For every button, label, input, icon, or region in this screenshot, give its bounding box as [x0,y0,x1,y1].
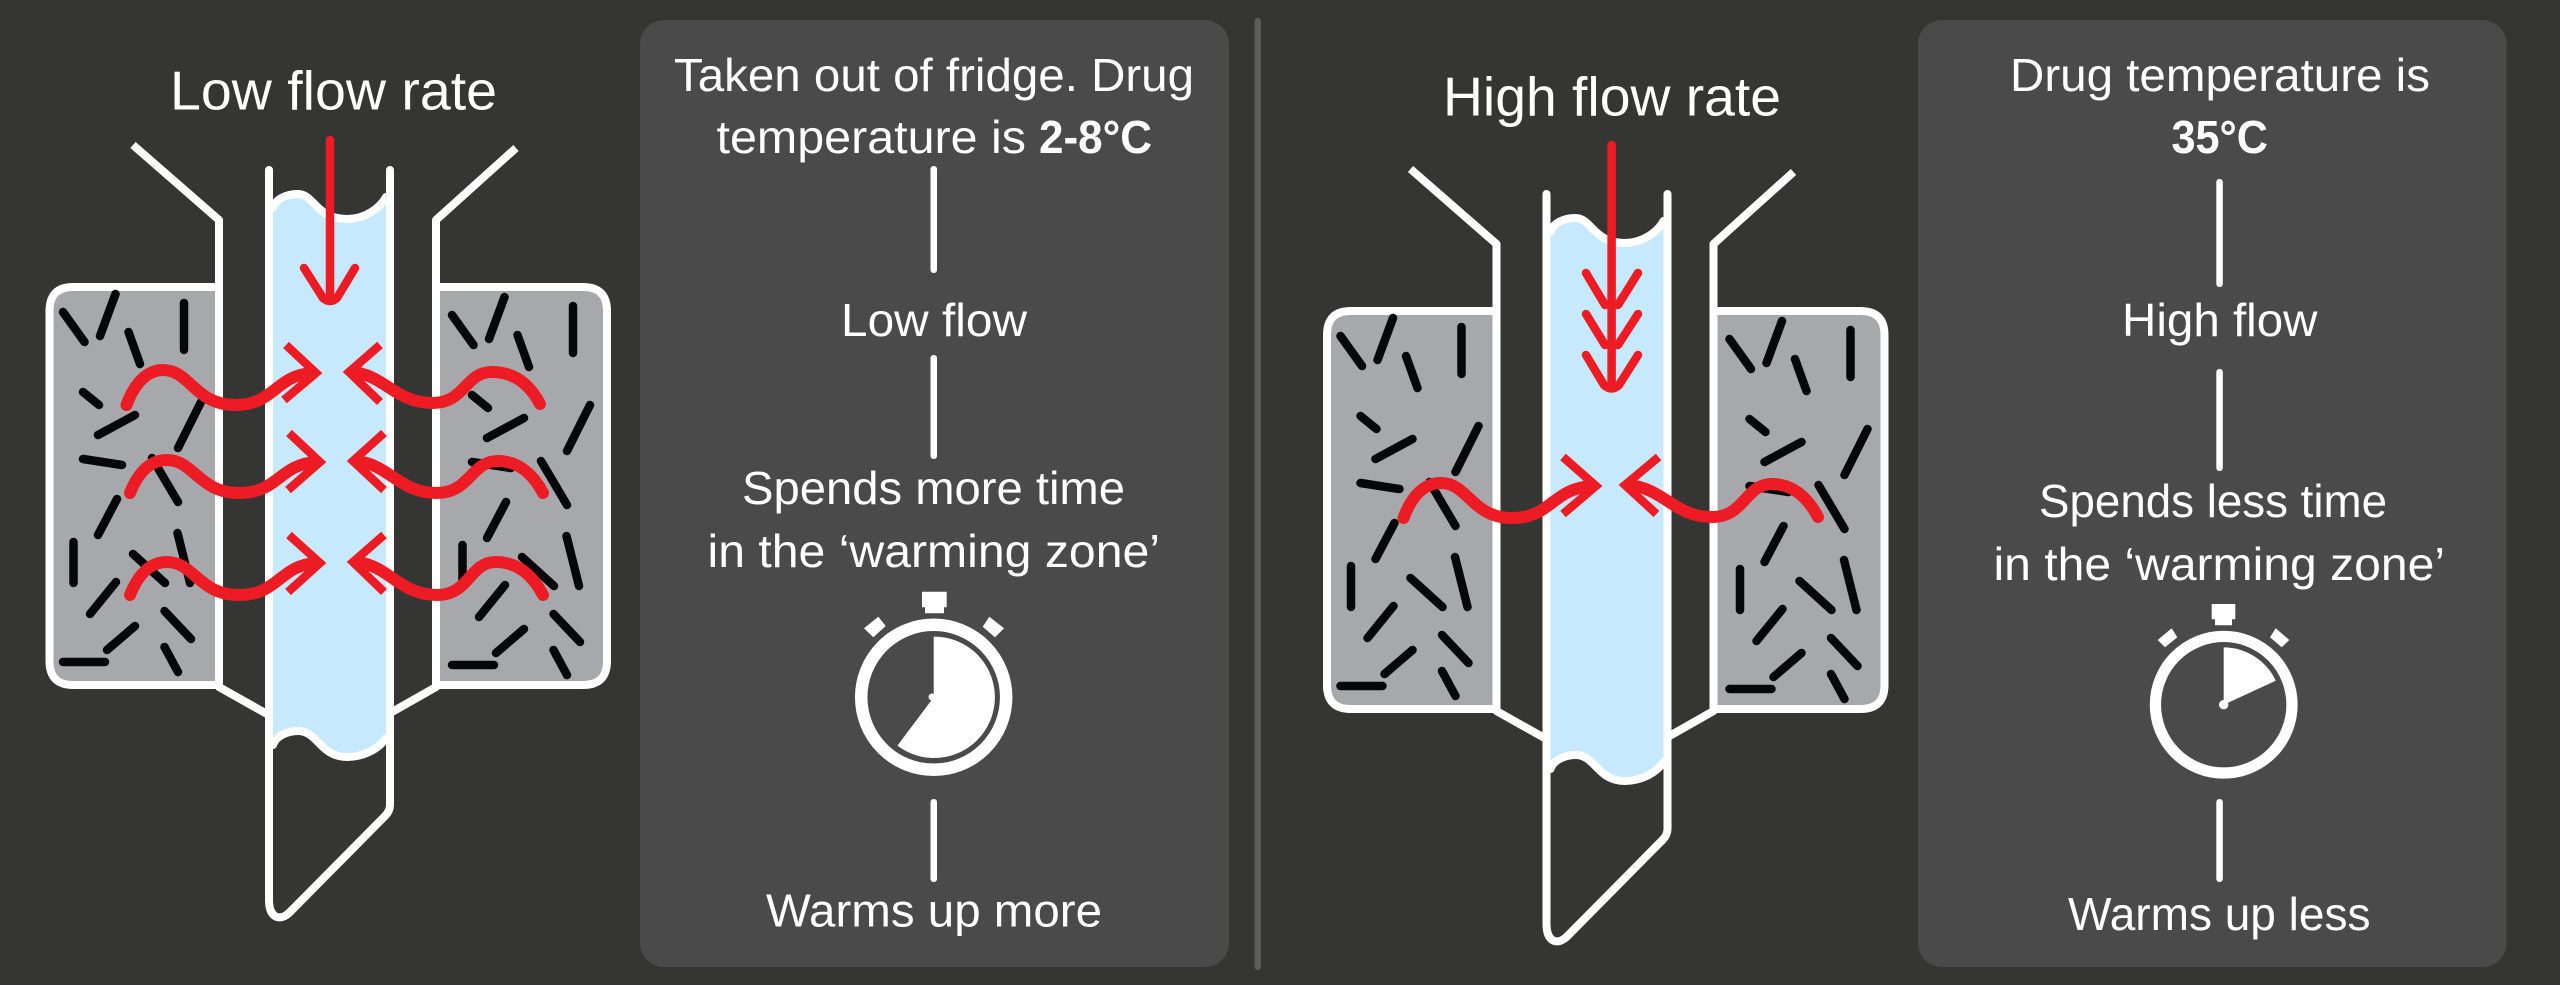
text: warms up less: Warms up less [2068,888,2370,940]
text: starting temperature: Taken out of fridge. Drug [674,49,1194,101]
needle tube [269,170,390,917]
drug liquid [273,194,386,757]
panel background [640,20,1229,967]
outer sleeve lines [1410,169,1794,738]
connector 3 [930,799,937,882]
heat arrows: left [126,345,320,595]
icon: stopwatch, short time [2155,604,2292,773]
outer sleeve lines [133,145,516,714]
panel: high flow explanation [1918,20,2506,967]
text: warms up more: Warms up more [766,884,1102,936]
text: more time in warming zone: in the ‘warming zone’ [708,525,1160,577]
meniscus lines [273,194,386,757]
text: starting temperature: temperature is [716,111,1026,163]
needle tube [1546,194,1668,941]
text: less time in warming zone: Spends less time [2039,475,2387,527]
needle body [1327,169,1884,941]
title: high flow rate: High flow rate [1443,66,1781,128]
panel background [1918,20,2506,967]
heat arrow: right [1625,457,1818,517]
connector 2 [930,355,937,459]
right tissue box [436,287,607,685]
text: starting temperature: Drug temperature is [2010,49,2430,101]
connector 3 [2216,799,2223,882]
text: starting temperature: 2-8°C [1039,111,1152,163]
text: more time in warming zone: Spends more time [742,462,1125,514]
text: starting temperature [674,49,1194,163]
text: starting temperature: 35°C [2172,111,2268,163]
connector 1 [2216,179,2223,287]
text: high flow: High flow [2122,294,2318,346]
heat arrow: left [1404,457,1596,518]
text: less time in warming zone: in the ‘warming zone’ [1994,538,2445,590]
meniscus lines [1550,218,1664,781]
text: low flow: Low flow [841,294,1028,346]
connector 2 [2216,369,2223,471]
right tissue particles [1730,321,1868,699]
connector 1 [930,166,937,273]
left tissue box [50,287,219,685]
panel: low flow explanation [640,20,1229,967]
heat arrows: right [349,345,543,595]
drug liquid [1550,218,1664,781]
arrow: fast flow down [1586,145,1638,388]
text: more time in warming zone [708,462,1160,577]
right tissue box [1714,311,1884,709]
title: low flow rate: Low flow rate [170,60,497,122]
icon: stopwatch, long time [861,592,1006,770]
left tissue box [1327,311,1496,709]
text: starting temperature [2010,49,2430,163]
left tissue particles [63,294,201,672]
right tissue particles [452,297,590,675]
left tissue particles [1340,318,1478,696]
centre divider [1254,18,1261,970]
diagram: needle at low flow rate [50,140,607,917]
diagram: needle at high flow rate [1327,145,1884,941]
text: less time in warming zone [1994,475,2445,590]
arrow: flow down [304,140,355,301]
